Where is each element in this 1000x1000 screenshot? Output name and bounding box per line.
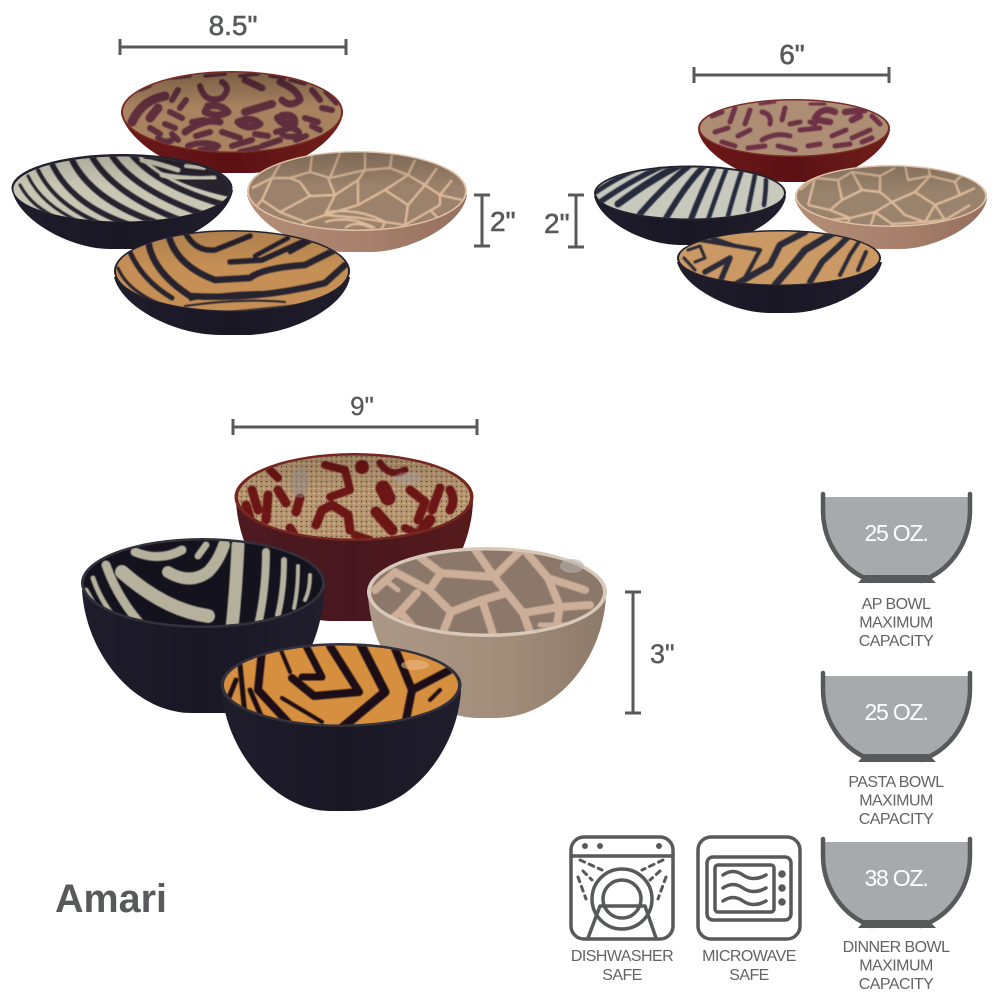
dimension: 2 inch height right: [544, 195, 584, 247]
label: microwave safe: MICROWAVE: [702, 948, 796, 965]
bowl set: AP bowls right: [594, 99, 987, 313]
label: AP bowl: MAXIMUM: [859, 614, 933, 632]
title: Amari: Amari: [55, 877, 167, 921]
icon: microwave: [698, 837, 800, 939]
label: microwave safe: SAFE: [729, 967, 769, 984]
icon: AP bowl outline: 25 OZ.: [864, 520, 928, 546]
bowl set: dinner bowls: [81, 453, 607, 811]
icon: pasta bowl outline: 25 OZ.: [864, 699, 928, 725]
label: pasta bowl: MAXIMUM: [859, 792, 933, 810]
icon: AP bowl outline: [823, 494, 970, 583]
bowl set: pasta bowls left: [12, 71, 467, 335]
label: dinner bowl: CAPACITY: [859, 976, 934, 993]
dimension: 2 inch height right: 2": [544, 208, 570, 239]
bowl: zebra small: [594, 165, 786, 245]
label: dishwasher safe: SAFE: [602, 967, 642, 984]
bowl: giraffe large: [367, 547, 607, 718]
icon: dinner bowl outline: 38 OZ.: [864, 865, 928, 891]
bowl: tiger pasta: [114, 230, 350, 335]
icon: dinner bowl outline: [823, 839, 970, 928]
dimension: 2 inch height left: [474, 195, 516, 246]
label: dishwasher safe: DISHWASHER: [571, 948, 673, 965]
bowl: leopard small: [698, 99, 890, 182]
label: AP bowl: CAPACITY: [859, 633, 934, 650]
label: dinner bowl: MAXIMUM: [859, 958, 933, 974]
label: pasta bowl: PASTA BOWL: [848, 774, 944, 791]
bowl: zebra large: [81, 538, 325, 713]
bowl: tiger large: [220, 643, 462, 811]
bowl: giraffe small: [795, 165, 987, 249]
dimension: 9 inch width: [233, 391, 477, 435]
label: AP bowl: AP BOWL: [862, 596, 930, 613]
dimension: 9 inch width: 9": [350, 391, 374, 421]
bowl: tiger small: [677, 230, 882, 313]
bowl: leopard large: [234, 453, 474, 621]
icon: dishwasher: [571, 837, 673, 939]
dimension: 2 inch height left: 2": [490, 206, 516, 237]
bowl: zebra pasta: [12, 150, 238, 249]
label: dinner bowl: DINNER BOWL: [843, 939, 949, 956]
dimension: 8.5 inch width: 8.5": [209, 10, 257, 41]
capacity: pasta bowl: [823, 673, 970, 828]
dimension: 6 inch width: [694, 39, 889, 83]
dimension: 6 inch width: 6": [779, 39, 805, 70]
dimension: 3 inch height: 3": [650, 639, 675, 669]
dimension: 8.5 inch width: [120, 10, 346, 55]
bowl: leopard pasta: [121, 71, 343, 173]
label: pasta bowl: CAPACITY: [859, 811, 934, 828]
capacity: dinner bowl: [823, 839, 970, 993]
capacity: AP bowl: [823, 494, 970, 650]
icon: pasta bowl outline: [823, 673, 970, 762]
bowl: giraffe pasta: [247, 151, 467, 252]
dimension: 3 inch height: [625, 592, 675, 713]
